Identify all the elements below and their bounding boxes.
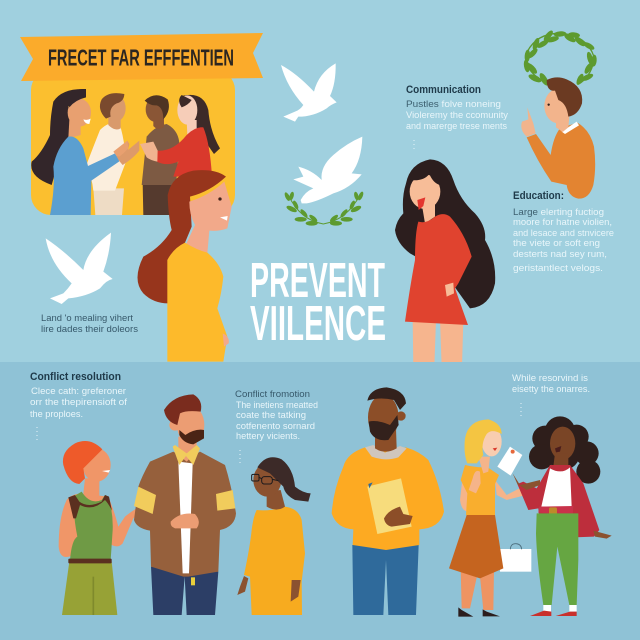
person: man pointing up in orange sweater xyxy=(521,77,595,199)
conflict resolution text block xyxy=(30,371,127,420)
group of four people talking xyxy=(31,89,220,215)
conflict promotion text block: hettery vicients. xyxy=(236,431,300,442)
banner title: FRECET FAR EFFFENTIEN xyxy=(48,44,234,70)
person: bearded man in brown shirt xyxy=(134,394,236,615)
education text block: Large elerting fuctiog xyxy=(513,207,604,218)
conflict promotion text block: cotfenento sornard xyxy=(236,421,315,432)
person: girl with glasses in yellow dress xyxy=(237,457,311,615)
main title: PREVENT xyxy=(250,254,385,308)
caption beside left dove: lire dades their doleors xyxy=(41,324,138,335)
person: curly-haired woman in red cardigan xyxy=(513,416,612,616)
education text block: the viete or soft eng xyxy=(513,238,600,249)
person: woman in yellow top xyxy=(137,170,232,362)
main title xyxy=(250,254,386,351)
communication text block: Violeremy the ccomunity xyxy=(406,110,508,121)
education text block xyxy=(513,190,614,274)
education text block: geristantlect velogs. xyxy=(513,263,603,274)
education text block: desterts nad sey rum, xyxy=(513,249,607,260)
yellow group panel xyxy=(31,70,235,215)
conflict resolution text block: Clece cath: greferoner xyxy=(31,386,126,397)
communication text block: Communication xyxy=(406,84,481,96)
person: blonde woman with paper xyxy=(449,419,531,617)
icon: paper with heart xyxy=(497,447,522,476)
main title: VIILENCE xyxy=(250,297,386,351)
while resolving text block xyxy=(512,373,590,395)
communication text block xyxy=(406,84,508,132)
education text block: and lesace and stnvicere xyxy=(513,228,614,239)
person: man in cream shirt xyxy=(86,93,139,215)
communication text block: and marerge trese ments xyxy=(406,121,507,132)
education text block: Education: xyxy=(513,190,564,202)
conflict promotion text block xyxy=(235,389,318,442)
person: man in brown shirt xyxy=(142,95,179,215)
conflict resolution text block: Conflict resolution xyxy=(30,371,121,383)
conflict promotion text block: The inetiens rneatted xyxy=(236,400,318,411)
lower band background xyxy=(0,362,640,640)
icon: white dove left xyxy=(46,233,113,304)
conflict resolution text block: the proploes. xyxy=(30,409,83,420)
conflict promotion text block: Conflict fromotion xyxy=(235,389,310,400)
banner ribbon with title xyxy=(20,33,263,81)
person: woman in red top xyxy=(140,95,220,177)
caption beside left dove xyxy=(41,313,138,335)
icon: white dove top xyxy=(281,63,337,122)
icon: white shopping bag xyxy=(500,544,531,572)
caption beside left dove: Land 'o mealing vihert xyxy=(41,313,133,324)
education text block: moore for hatne violien, xyxy=(513,217,612,228)
conflict resolution text block: orr the thepirensioft of xyxy=(30,397,127,408)
while resolving text block: eisetty the onarres. xyxy=(512,384,590,395)
while resolving text block: While resorvind is xyxy=(512,373,588,384)
person: woman in blue top xyxy=(31,89,128,215)
icon: laurel wreath xyxy=(523,29,597,87)
person: woman with red hair and green top xyxy=(59,441,151,615)
icon: dove with laurel branch xyxy=(284,137,364,226)
conflict promotion text block: coate the tatking xyxy=(236,410,306,421)
person: woman in red dress xyxy=(395,159,495,367)
communication text block: Pustles folve noneing xyxy=(406,99,501,110)
person: bearded man with book xyxy=(332,387,444,615)
